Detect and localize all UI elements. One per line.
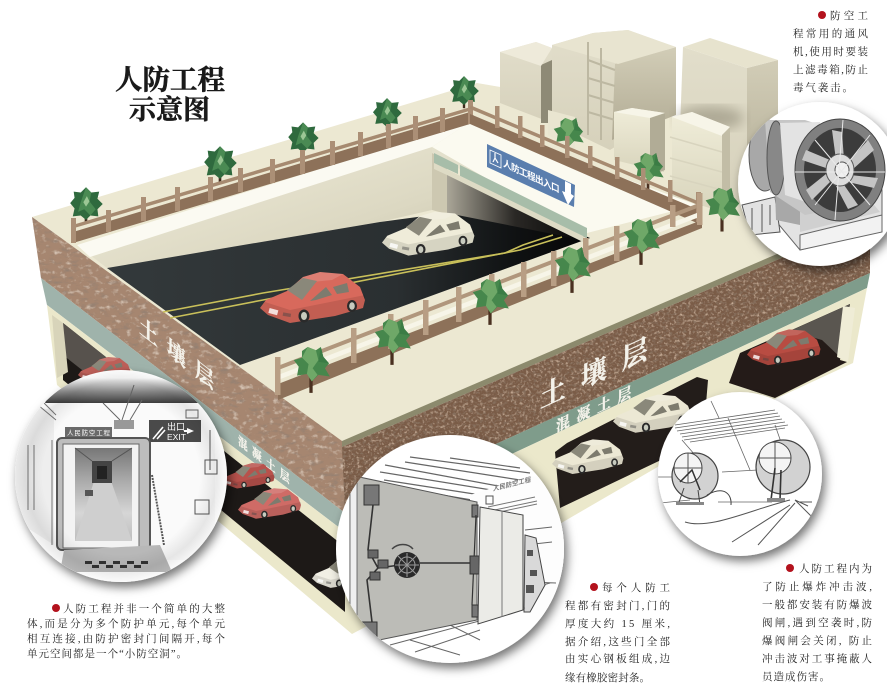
building B <box>552 30 676 150</box>
small box left of B <box>548 110 575 150</box>
cables <box>103 385 142 420</box>
text: blast valves: 了防止爆炸冲击波, <box>762 580 872 593</box>
title <box>115 64 225 125</box>
fire equipment <box>524 535 545 612</box>
fan blades <box>802 130 878 209</box>
text: ventilation fans: 程常用的通风 <box>793 27 868 40</box>
tree <box>555 247 591 293</box>
text: blast valves: 人防工程内为 <box>799 562 872 575</box>
wall and sign: 人民防空工程 <box>493 474 531 493</box>
exit sign: 出口 <box>167 421 185 432</box>
white car on road <box>382 212 474 256</box>
label: soil layer right: 土壤层 <box>540 326 663 415</box>
parking bay: left <box>52 315 377 612</box>
soil layer: right face <box>342 214 870 513</box>
white car <box>312 556 377 588</box>
text: blast valves: 阀闸,遇到空袭时,防 <box>762 616 872 629</box>
back trees <box>70 76 664 223</box>
exit sign: EXIT <box>167 432 186 442</box>
circle: blast valves <box>658 392 822 556</box>
tree <box>473 279 509 325</box>
white car <box>552 439 623 474</box>
linkage rods <box>367 505 476 622</box>
tree <box>375 319 411 365</box>
door plate <box>350 475 477 646</box>
bridge lower edge <box>434 163 587 244</box>
sign text: 人防工程出入口 <box>503 157 559 196</box>
title line 1: 人防工程 <box>115 64 225 95</box>
text: protective units: 体,而是分为多个防护单元,每个单元 <box>27 617 226 630</box>
open door leaf <box>478 507 523 624</box>
tree <box>204 146 237 182</box>
red car <box>222 463 274 488</box>
text: sealed doors: 程都有密封门,门的 <box>565 599 670 612</box>
ramp: side wall <box>77 147 432 268</box>
right wall fittings <box>152 430 217 545</box>
tree <box>373 98 402 130</box>
concrete layer: left band <box>41 278 345 532</box>
text: sealed doors <box>565 581 670 684</box>
floor <box>60 545 172 572</box>
right valve <box>756 440 810 502</box>
label: concrete layer left: 混凝土层 <box>238 432 294 490</box>
plateau top surface <box>32 83 880 444</box>
door frame <box>57 438 150 550</box>
text: protective units: 相互连接,由防护密封门间隔开,每个 <box>27 632 226 645</box>
ramp: white top strip <box>77 122 470 257</box>
locking hinges <box>362 485 478 642</box>
tunnel entrance <box>432 122 697 244</box>
sign icon <box>490 150 501 168</box>
text: blast valves <box>762 562 872 683</box>
red car <box>747 329 820 365</box>
left wall <box>15 405 54 545</box>
back fence <box>71 100 480 243</box>
sign: shelter entrance <box>487 144 575 207</box>
front fence <box>275 193 702 400</box>
bullet <box>818 11 826 19</box>
bridge edge <box>432 147 583 240</box>
bridge green band <box>460 165 587 238</box>
door wheel <box>392 544 420 578</box>
bullet <box>52 604 60 612</box>
text: protective units: 单元空间都是一个“小防空洞”。 <box>27 647 187 660</box>
building A <box>500 42 552 123</box>
left valve <box>672 453 731 505</box>
exit sign <box>149 420 201 442</box>
fan interior <box>804 128 876 212</box>
fan support <box>775 196 800 225</box>
text: blast valves: 冲击波对工事掩蔽人 <box>762 652 872 665</box>
door sign: 人民防空工程 <box>67 428 110 437</box>
yellow lane lines <box>163 235 562 318</box>
text: ventilation fans: 上滤毒箱,防止 <box>793 63 868 76</box>
red car on road <box>260 272 365 323</box>
floor lines <box>685 500 815 545</box>
text: sealed doors: 每个人防工 <box>602 581 670 594</box>
parking bay: centre right <box>552 377 708 508</box>
text: blast valves: 爆阀闸会关闭, 防止 <box>762 634 872 647</box>
label: concrete layer right: 混凝土层 <box>556 380 638 436</box>
ceiling vignette <box>45 378 200 403</box>
fan front ring <box>795 119 885 221</box>
red car <box>78 357 130 382</box>
text: ventilation fans <box>793 9 868 94</box>
back right fence <box>470 106 701 223</box>
base platform <box>775 190 882 250</box>
far wall <box>525 527 556 590</box>
circle: sealed blast door <box>336 435 565 663</box>
circle: protective door corridor <box>15 370 227 582</box>
tree <box>624 219 660 265</box>
corridor <box>75 448 132 541</box>
text: ventilation fans: 防空工 <box>830 9 868 22</box>
title line 2: 示意图 <box>129 94 210 125</box>
lower storey walls <box>47 288 867 634</box>
tree <box>634 153 664 191</box>
tree <box>294 347 330 393</box>
tree <box>706 188 740 232</box>
door sign <box>65 427 112 437</box>
text: ventilation fans: 机,使用时要装 <box>793 45 868 58</box>
bullet <box>786 564 794 572</box>
box in front of B <box>614 108 665 176</box>
text: sealed doors: 据介绍,这些门全部 <box>565 635 670 648</box>
soil layer: left face <box>32 217 345 513</box>
base bracket left <box>742 197 780 235</box>
label: soil layer left: 土壤层 <box>139 313 223 402</box>
text: protective units: 人防工程并非一个简单的大整 <box>63 602 226 615</box>
ceiling grate <box>658 401 788 503</box>
text: blast valves: 员造成伤害。 <box>762 670 830 683</box>
red car <box>238 488 301 519</box>
text: protective units <box>27 602 226 660</box>
text: blast valves: 一般都安装有防爆波 <box>762 598 872 611</box>
bullet <box>590 583 598 591</box>
white car <box>613 394 692 433</box>
bridge green band left <box>434 153 458 174</box>
buildings <box>500 30 778 212</box>
text: ventilation fans: 毒气袭击。 <box>793 81 853 94</box>
fan hub <box>826 154 854 186</box>
tree <box>450 76 479 108</box>
box in front of C <box>670 106 744 212</box>
wall and sign <box>470 474 565 620</box>
sign arrow <box>562 181 574 205</box>
ceiling lines <box>380 456 530 500</box>
text: sealed doors: 由实心钢板组成,边 <box>565 652 670 665</box>
front trees <box>294 188 740 393</box>
tree <box>70 187 103 223</box>
fan casing <box>748 120 820 215</box>
text: sealed doors: 缘有橡胶密封条。 <box>565 671 650 684</box>
tree <box>554 118 584 156</box>
text: sealed doors: 厚度大约 15 厘米, <box>565 617 670 630</box>
bridge deck <box>432 122 697 234</box>
parking bay: right <box>729 304 855 398</box>
concrete layer: right band <box>345 273 870 532</box>
building C <box>678 38 778 205</box>
road <box>107 178 590 365</box>
tree <box>288 122 319 156</box>
circle: ventilation fan <box>738 102 887 266</box>
floor lines <box>390 608 525 655</box>
